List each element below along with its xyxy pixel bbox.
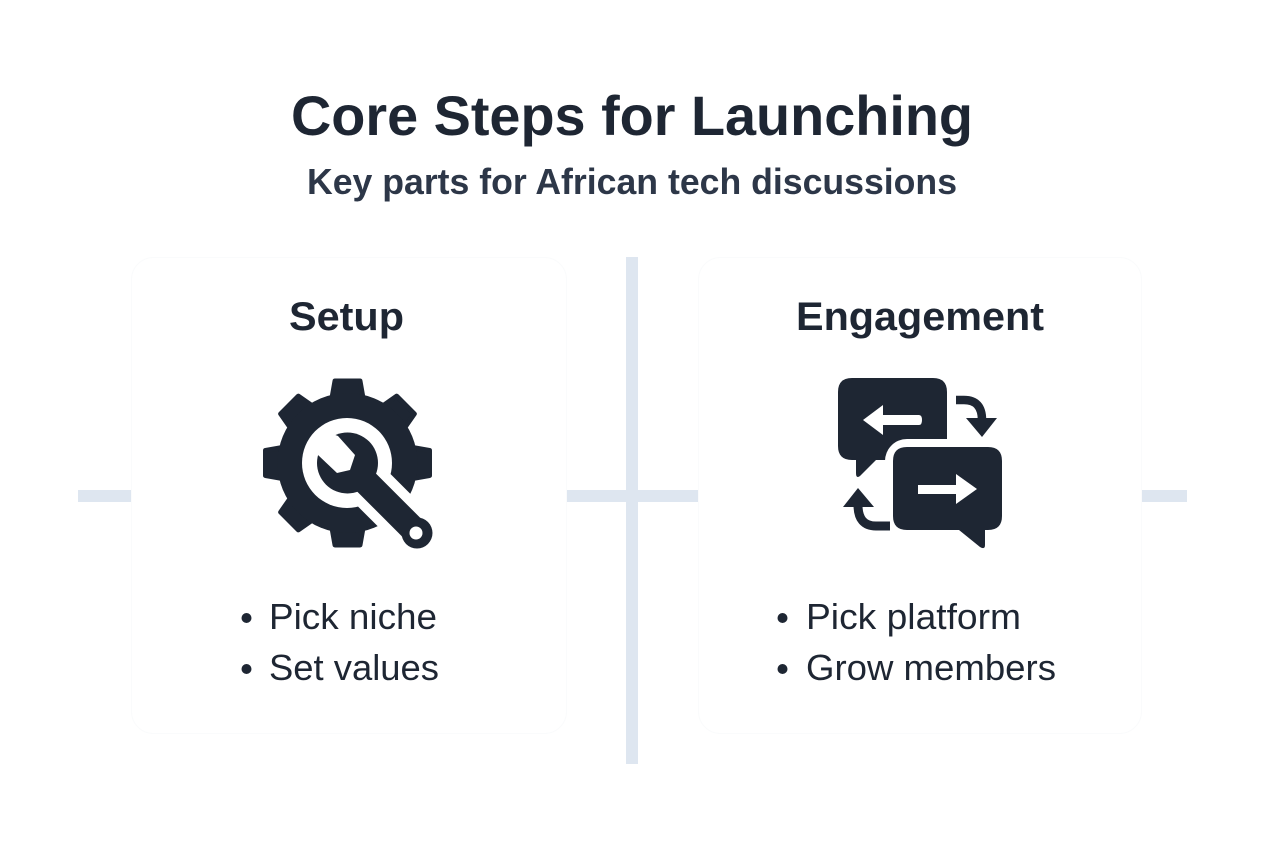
icon: chat bubbles exchange — [838, 378, 1010, 548]
panel: setup — [132, 258, 566, 734]
icon: gear and wrench — [266, 381, 440, 556]
heading: setup: Setup — [289, 295, 404, 339]
list: engagement items: Pick platform — [806, 596, 1021, 637]
subtitle: Key parts for African tech discussions — [307, 161, 957, 202]
panel: engagement — [698, 258, 1142, 734]
list: engagement items — [778, 596, 1056, 688]
list: setup items: Pick niche — [269, 596, 437, 637]
title: Core Steps for Launching — [291, 84, 973, 147]
list: engagement items: Grow members — [806, 647, 1056, 688]
list: setup items: Set values — [269, 647, 439, 688]
list: setup items — [242, 596, 439, 688]
heading: engagement: Engagement — [796, 295, 1044, 339]
